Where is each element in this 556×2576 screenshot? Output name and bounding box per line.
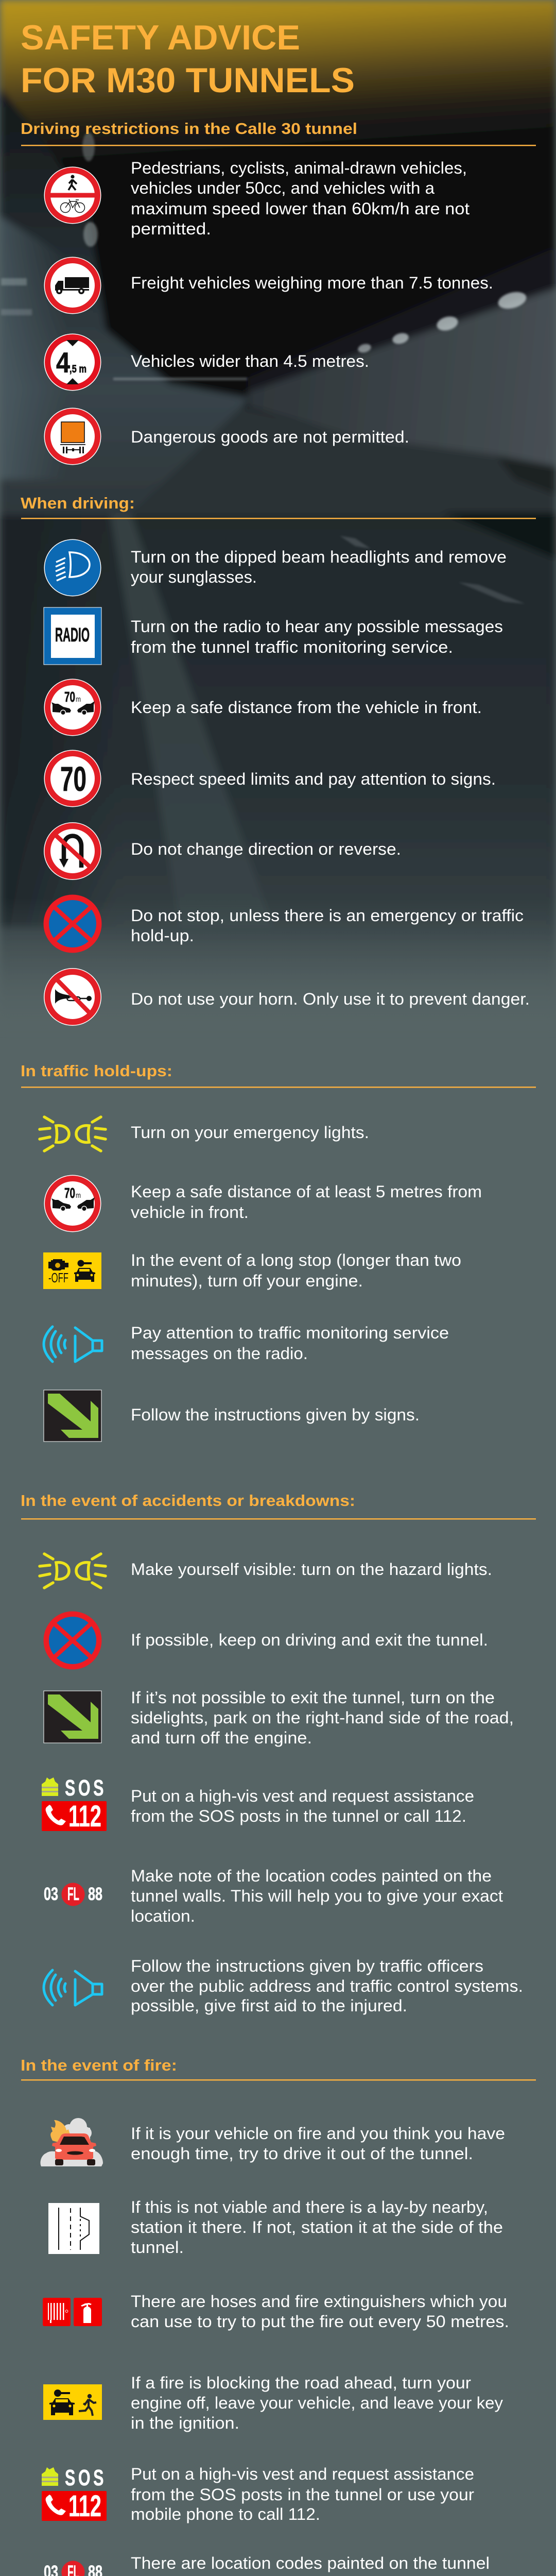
icon: location code: 03 (44, 1884, 58, 1904)
text (131, 1867, 503, 1925)
text: Do not use your horn. Only use it to prevent danger. (131, 990, 530, 1008)
icon: 4.5 m limit sign: ,5 m (70, 363, 86, 375)
title: FOR M30 TUNNELS (21, 61, 355, 100)
text: If a fire is blocking the road ahead, turn your (131, 2374, 471, 2392)
icon: vest, SOS and 112: 112 (68, 1800, 101, 1833)
text: tunnel walls. This will help you to give your exact (131, 1887, 503, 1905)
icon: location code (44, 2561, 102, 2576)
text: can use to try to put the fire out every 50 metres. (131, 2312, 509, 2331)
text (131, 1787, 474, 1825)
icon: lay-by diagram (48, 2203, 99, 2254)
text (131, 548, 507, 586)
icon: vest, SOS and 112 (42, 2465, 107, 2523)
text: hold-up. (131, 926, 194, 945)
text: possible, give first aid to the injured. (131, 1996, 407, 2015)
text: station it there. If not, station it at the side of the (131, 2218, 503, 2236)
item: wide vehicles (44, 334, 369, 391)
text (131, 1688, 514, 1747)
icon: no horn sign (44, 968, 101, 1026)
item: lay-by (48, 2198, 503, 2257)
text: in the ignition. (131, 2414, 239, 2432)
section heading: driving restrictions: Driving restrictions in the Calle 30 tunnel (21, 120, 357, 138)
text: vehicle in front. (131, 1203, 249, 1222)
text: engine off, leave your vehicle, and leave your key (131, 2394, 503, 2412)
text: sidelights, park on the right-hand side of the road, (131, 1708, 514, 1727)
icon: car on fire (40, 2118, 103, 2166)
text: Turn on the radio to hear any possible messages (131, 617, 503, 636)
item: emergency lights (40, 1117, 369, 1151)
item: freight vehicles (44, 257, 493, 314)
text: Pedestrians, cyclists, animal-drawn vehicles, (131, 159, 467, 177)
title: SAFETY ADVICE (21, 18, 300, 57)
icon: no pedestrians or bicycles sign (44, 167, 101, 224)
text: maximum speed lower than 60km/h are not (131, 199, 470, 218)
text: location. (131, 1907, 195, 1925)
text: Keep a safe distance from the vehicle in front. (131, 698, 482, 717)
icon: no dangerous goods sign (44, 408, 101, 465)
text: from the tunnel traffic monitoring service. (131, 638, 453, 656)
text: Vehicles wider than 4.5 metres. (131, 352, 369, 370)
text (131, 2124, 505, 2163)
item: high-vis vest and SOS (42, 1775, 474, 1833)
text: minutes), turn off your engine. (131, 1272, 363, 1290)
text: messages on the radio. (131, 1344, 308, 1363)
item: do not stop (43, 894, 524, 953)
section heading: fire: In the event of fire: (21, 2056, 177, 2074)
icon: location code: 88 (88, 1884, 102, 1904)
text: Do not change direction or reverse. (131, 840, 401, 858)
icon: location code (44, 1883, 102, 1906)
icon: no U-turn sign (44, 822, 101, 880)
text: If it’s not possible to exit the tunnel, turn on the (131, 1688, 495, 1707)
item: radio (44, 607, 503, 665)
text: and turn off the engine. (131, 1728, 312, 1747)
icon: leave vehicle panel (43, 2384, 102, 2420)
item: hazard lights (40, 1554, 492, 1588)
text: vehicles under 50cc, and vehicles with a (131, 179, 435, 197)
text (131, 2198, 503, 2257)
item: pedestrians and cyclists prohibited (44, 159, 470, 238)
text: your sunglasses. (131, 568, 257, 586)
section heading: when driving: When driving: (21, 494, 135, 512)
icon: vest, SOS and 112: SOS (65, 2465, 107, 2490)
item: horn (44, 968, 530, 1026)
text: Make note of the location codes painted on the (131, 1867, 492, 1885)
icon: location code: FL (67, 1884, 79, 1904)
text: Keep a safe distance of at least 5 metres from (131, 1182, 482, 1201)
text: permitted. (131, 219, 211, 238)
item: radio messages (44, 1324, 449, 1363)
icon: hazard lights (40, 1554, 106, 1588)
icon: loudspeaker (44, 1327, 102, 1362)
text: Put on a high-vis vest and request assistance (131, 1787, 474, 1805)
icon: green arrow panel (44, 1691, 101, 1743)
icon: hazard lights (40, 1117, 106, 1151)
text (131, 617, 503, 656)
text: Follow the instructions given by signs. (131, 1405, 420, 1424)
item: no reversing (44, 822, 401, 880)
icon: 70 speed limit sign: 70 (60, 760, 86, 799)
icon: loudspeaker (44, 1970, 102, 2005)
icon: no trucks sign (44, 257, 101, 314)
text: over the public address and traffic control systems. (131, 1977, 523, 1995)
icon: 4.5 m limit sign (44, 334, 101, 391)
item: traffic officers (44, 1957, 523, 2015)
icon: vest, SOS and 112 (42, 1775, 107, 1833)
icon: engine off panel: -OFF (48, 1270, 68, 1285)
text: Respect speed limits and pay attention to signs. (131, 770, 496, 788)
text (131, 906, 524, 945)
text: Follow the instructions given by traffic officers (131, 1957, 483, 1975)
text (131, 1251, 461, 1290)
text (131, 1957, 523, 2015)
item: dangerous goods (44, 408, 409, 465)
icon: 70 m distance sign: m (76, 695, 81, 704)
text (131, 2465, 474, 2523)
icon: engine off panel (43, 1252, 101, 1289)
item: location codes on walls (44, 2554, 490, 2576)
item: high-vis vest and SOS, mobile (42, 2465, 474, 2523)
icon: 70 m distance sign: m (76, 1191, 81, 1200)
text: Make yourself visible: turn on the hazard lights. (131, 1560, 492, 1579)
text: from the SOS posts in the tunnel or call 112. (131, 1807, 466, 1825)
text (131, 1182, 482, 1222)
text: enough time, try to drive it out of the tunnel. (131, 2144, 473, 2163)
item: hoses and extinguishers (43, 2292, 509, 2331)
background: tunnel photo with gold overlay (0, 0, 556, 1030)
icon: 4.5 m limit sign: 4 (56, 346, 70, 379)
text: If it is your vehicle on fire and you think you have (131, 2124, 505, 2143)
icon: no stopping sign (43, 1612, 102, 1669)
icon: 70 m distance sign (44, 1175, 101, 1232)
text (131, 2374, 503, 2432)
icon: vest, SOS and 112: 112 (68, 2489, 101, 2523)
text (131, 159, 470, 238)
title (21, 18, 355, 100)
item: long stop (43, 1251, 461, 1290)
section heading: accidents or breakdowns: In the event of accidents or breakdowns: (21, 1492, 355, 1510)
text: Put on a high-vis vest and request assistance (131, 2465, 474, 2483)
icon: radio sign: RADIO (55, 624, 90, 646)
icon: 70 m distance sign: 70 (64, 1185, 75, 1201)
text: from the SOS posts in the tunnel or use your (131, 2485, 474, 2504)
icon: no stopping sign (43, 894, 102, 953)
item: follow signs (44, 1390, 420, 1442)
icon: 70 m distance sign (44, 679, 101, 736)
icon: dipped beam headlights sign (44, 539, 101, 597)
item: location codes (44, 1867, 503, 1925)
section heading: traffic hold-ups: In traffic hold-ups: (21, 1062, 172, 1080)
text: tunnel. (131, 2238, 184, 2257)
text: Dangerous goods are not permitted. (131, 428, 409, 446)
icon: green arrow panel (44, 1390, 101, 1442)
text: In the event of a long stop (longer than two (131, 1251, 461, 1269)
item: vehicle on fire (40, 2118, 505, 2166)
icon: 70 m distance sign: 70 (64, 689, 75, 705)
item: park at the side (44, 1688, 514, 1747)
text: There are location codes painted on the tunnel (131, 2554, 490, 2572)
text: mobile phone to call 112. (131, 2505, 320, 2523)
text (131, 2292, 509, 2331)
item: keep driving (43, 1612, 488, 1669)
item: safe distance (44, 679, 482, 736)
icon: 70 speed limit sign (44, 750, 101, 807)
item: speed limits (44, 750, 496, 807)
text: There are hoses and fire extinguishers which you (131, 2292, 507, 2311)
item: keep 5 metres (44, 1175, 482, 1232)
icon: vest, SOS and 112: SOS (65, 1775, 107, 1801)
text: If this is not viable and there is a lay-by nearby, (131, 2198, 488, 2216)
icon: hose and extinguisher panels (43, 2298, 102, 2326)
text: Turn on your emergency lights. (131, 1123, 369, 1142)
icon: radio sign (44, 607, 101, 665)
item: dipped beam (44, 539, 507, 597)
text: Do not stop, unless there is an emergency or traffic (131, 906, 524, 925)
text (131, 1324, 449, 1363)
text: Turn on the dipped beam headlights and remove (131, 548, 507, 566)
text: Freight vehicles weighing more than 7.5 tonnes. (131, 274, 493, 292)
item: fire blocking the road (43, 2374, 503, 2432)
text: If possible, keep on driving and exit the tunnel. (131, 1631, 488, 1649)
text: Pay attention to traffic monitoring service (131, 1324, 449, 1342)
